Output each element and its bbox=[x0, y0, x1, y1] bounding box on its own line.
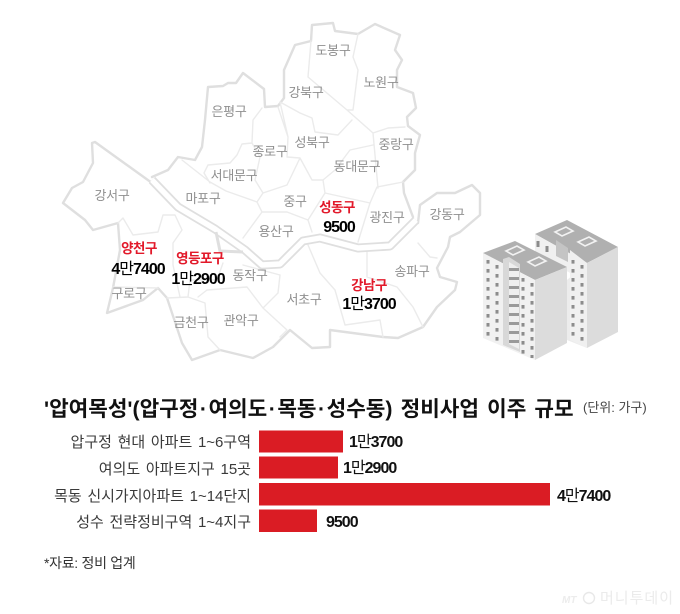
watermark logo: 머니투데이 bbox=[600, 590, 674, 607]
callout: Yangcheon: 양천구 bbox=[121, 241, 157, 256]
callout: Seongdong bbox=[319, 200, 356, 236]
callout: Yeongdeungpo: 영등포구 bbox=[176, 251, 224, 266]
district labels: 강북구 bbox=[289, 85, 324, 100]
district labels: 강동구 bbox=[430, 207, 465, 222]
row: Yeouido bbox=[99, 456, 397, 478]
watermark logo: MT bbox=[562, 595, 577, 606]
district labels: 송파구 bbox=[395, 264, 430, 279]
row: Seongsu bbox=[76, 510, 359, 532]
row: Mokdong: 4만7400 bbox=[557, 487, 611, 505]
watermark logo bbox=[562, 590, 674, 607]
Han river bbox=[152, 180, 416, 265]
source note: *자료: 정비 업계 bbox=[44, 555, 135, 571]
row: Seongsu: 9500 bbox=[326, 514, 359, 531]
callout: Seongdong: 성동구 bbox=[319, 200, 355, 215]
unit note: (단위: 가구) bbox=[583, 400, 647, 415]
district labels: 중구 bbox=[283, 194, 307, 209]
district labels: 구로구 bbox=[112, 286, 147, 301]
front building bbox=[483, 241, 567, 360]
row: Apgujeong: 압구정 현대 아파트 1~6구역 bbox=[71, 434, 251, 451]
district labels: 종로구 bbox=[253, 144, 288, 159]
district labels: 강서구 bbox=[95, 188, 130, 203]
Yeouido island bbox=[216, 232, 243, 252]
district labels: 도봉구 bbox=[316, 43, 351, 58]
row: Yeouido: 1만2900 bbox=[343, 459, 397, 477]
row: Seongsu: 성수 전략정비구역 1~4지구 bbox=[76, 514, 251, 531]
district labels: 서초구 bbox=[287, 292, 322, 307]
district labels: 금천구 bbox=[174, 315, 209, 330]
row: Apgujeong: 1만3700 bbox=[349, 433, 403, 451]
callout: Yangcheon bbox=[111, 241, 166, 278]
row: Apgujeong bbox=[71, 430, 403, 452]
callout: Gangnam: 강남구 bbox=[351, 278, 387, 293]
district labels: 노원구 bbox=[364, 75, 399, 90]
map of Seoul districts bbox=[63, 23, 480, 360]
district labels: 동대문구 bbox=[334, 159, 381, 174]
row: Yeouido: 여의도 아파트지구 15곳 bbox=[99, 461, 251, 478]
callout: Seongdong: 9500 bbox=[323, 219, 356, 236]
district labels: 성북구 bbox=[295, 135, 330, 150]
title: '압여목성'(압구정·여의도·목동·성수동) 정비사업 이주 규모 bbox=[44, 397, 574, 421]
district labels bbox=[95, 43, 465, 330]
district border lines bbox=[113, 34, 437, 350]
row: Mokdong bbox=[54, 483, 611, 506]
district labels: 은평구 bbox=[212, 104, 247, 119]
outer boundary south of river bbox=[63, 142, 480, 360]
district labels: 동작구 bbox=[233, 268, 268, 283]
district labels: 중랑구 bbox=[379, 137, 414, 152]
callout: Yeongdeungpo bbox=[171, 251, 226, 288]
back building bbox=[535, 220, 618, 348]
outer boundary north of river bbox=[152, 23, 420, 217]
callout: Gangnam: 1만3700 bbox=[342, 295, 397, 313]
district labels: 용산구 bbox=[259, 224, 294, 239]
callout: Yeongdeungpo: 1만2900 bbox=[171, 270, 226, 288]
district labels: 마포구 bbox=[186, 191, 221, 206]
district labels: 광진구 bbox=[370, 210, 405, 225]
district labels: 서대문구 bbox=[211, 168, 258, 183]
icon: apartment buildings bbox=[483, 220, 618, 360]
callout: Yangcheon: 4만7400 bbox=[111, 260, 166, 278]
district labels: 관악구 bbox=[224, 313, 259, 328]
callout: Gangnam bbox=[342, 278, 397, 313]
row: Mokdong: 목동 신시가지아파트 1~14단지 bbox=[54, 488, 251, 505]
bar chart bbox=[54, 430, 611, 532]
